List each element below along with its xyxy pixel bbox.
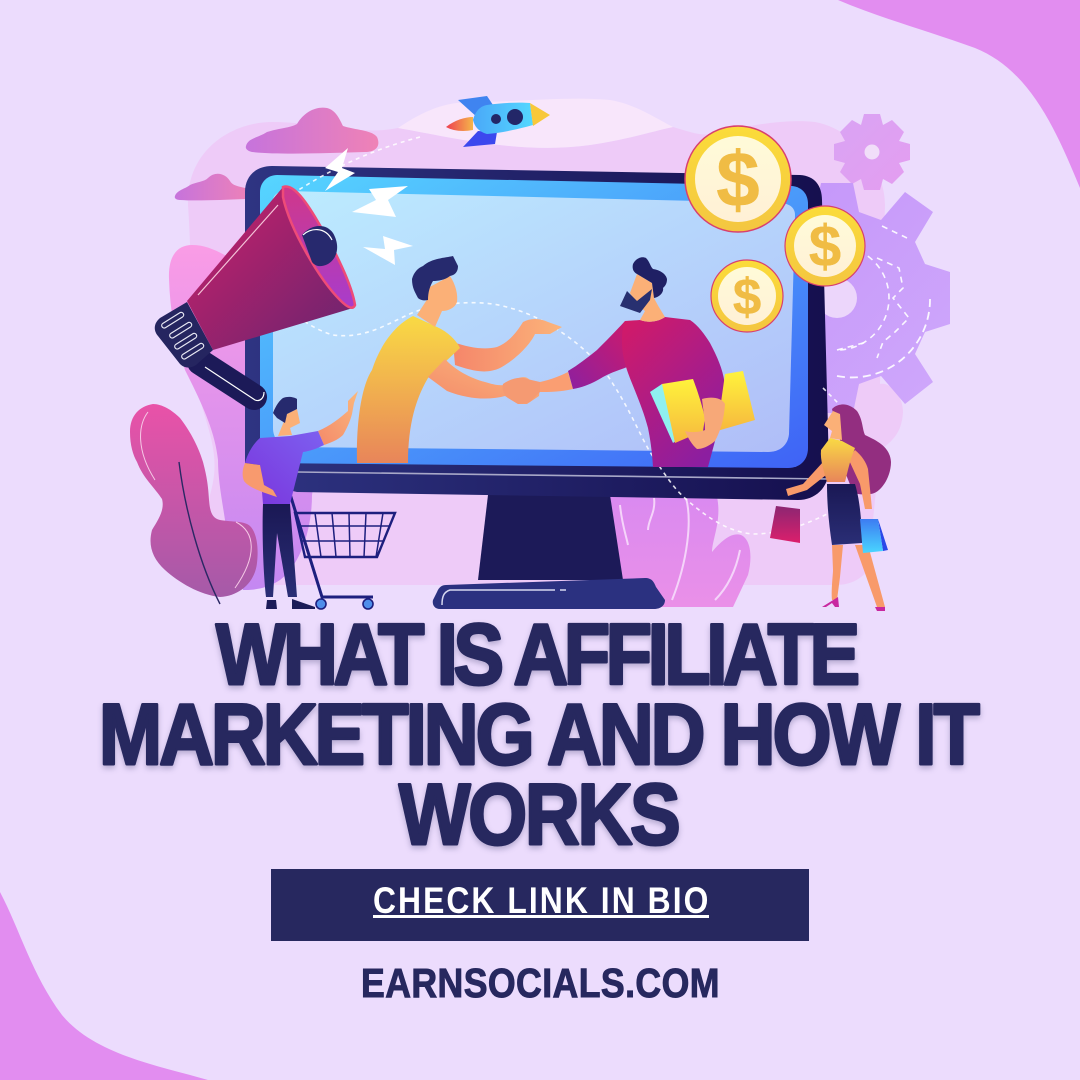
hair xyxy=(412,256,458,300)
lightning bolts xyxy=(325,148,413,265)
cone xyxy=(187,187,353,350)
rocket xyxy=(446,96,550,147)
head xyxy=(278,409,300,436)
folder front xyxy=(662,379,705,443)
title xyxy=(99,608,980,863)
torso xyxy=(622,317,725,467)
neck and face xyxy=(630,274,665,322)
title: WORKS xyxy=(399,768,681,863)
coin: medium: $ xyxy=(809,214,841,279)
handshake xyxy=(503,378,540,404)
monitor inner bezel xyxy=(260,175,808,468)
coin: large: $ xyxy=(716,135,760,223)
man pointing xyxy=(243,391,358,609)
icon: small gear xyxy=(834,114,910,190)
background blobs behind monitor xyxy=(169,99,903,607)
folder back xyxy=(717,371,755,431)
skirt xyxy=(827,484,862,545)
coin: large xyxy=(685,126,791,232)
near arm xyxy=(428,359,540,404)
holding hand xyxy=(685,398,725,449)
title: WHAT IS AFFILIATE xyxy=(216,608,860,703)
plant behind monitor xyxy=(608,497,750,607)
woman with bags xyxy=(770,404,891,611)
corner shape: bottom left xyxy=(0,892,208,1080)
pink blob left xyxy=(169,245,320,590)
person: red sweater xyxy=(538,257,755,467)
hair xyxy=(273,397,297,423)
left arm xyxy=(243,463,277,497)
raised arm xyxy=(318,391,358,445)
dashed trail lines xyxy=(266,137,845,534)
corner shape: top right xyxy=(838,0,1080,188)
icon: large gear xyxy=(747,183,950,413)
monitor screen xyxy=(273,191,795,452)
shoes xyxy=(266,599,315,609)
coin: small xyxy=(711,260,783,332)
legs xyxy=(263,504,297,597)
beard xyxy=(620,289,652,313)
shoes xyxy=(822,597,885,611)
torso xyxy=(357,316,460,463)
monitor stand xyxy=(478,495,623,580)
torso xyxy=(245,431,324,504)
rim xyxy=(283,187,355,308)
person: yellow shirt xyxy=(357,256,562,463)
far arm xyxy=(453,319,562,371)
button: check link in bio: CHECK LINK IN BIO xyxy=(373,881,708,922)
arms xyxy=(786,462,826,496)
speaker cap xyxy=(302,226,337,266)
handle xyxy=(200,362,254,397)
button: check link in bio xyxy=(271,869,809,941)
shopping cart xyxy=(290,494,395,609)
folder cyan xyxy=(650,384,690,443)
grip xyxy=(155,302,213,368)
head xyxy=(824,411,842,440)
title: MARKETING AND HOW IT xyxy=(99,688,980,783)
arm skin xyxy=(538,372,573,392)
neck and face xyxy=(417,276,457,327)
website text: EARNSOCIALS.COM xyxy=(361,961,719,1007)
clouds xyxy=(175,108,378,200)
top xyxy=(821,438,855,482)
plant: left xyxy=(130,404,258,604)
monitor frame xyxy=(245,166,829,500)
coin: small: $ xyxy=(733,268,761,325)
blue bag xyxy=(878,519,888,551)
megaphone xyxy=(155,187,355,401)
monitor xyxy=(245,166,829,609)
coin: medium xyxy=(785,206,865,286)
monitor base xyxy=(433,578,665,609)
hair xyxy=(832,404,891,494)
red bag xyxy=(770,506,800,543)
arm xyxy=(568,321,627,389)
hair xyxy=(633,257,667,298)
legs xyxy=(832,545,885,607)
